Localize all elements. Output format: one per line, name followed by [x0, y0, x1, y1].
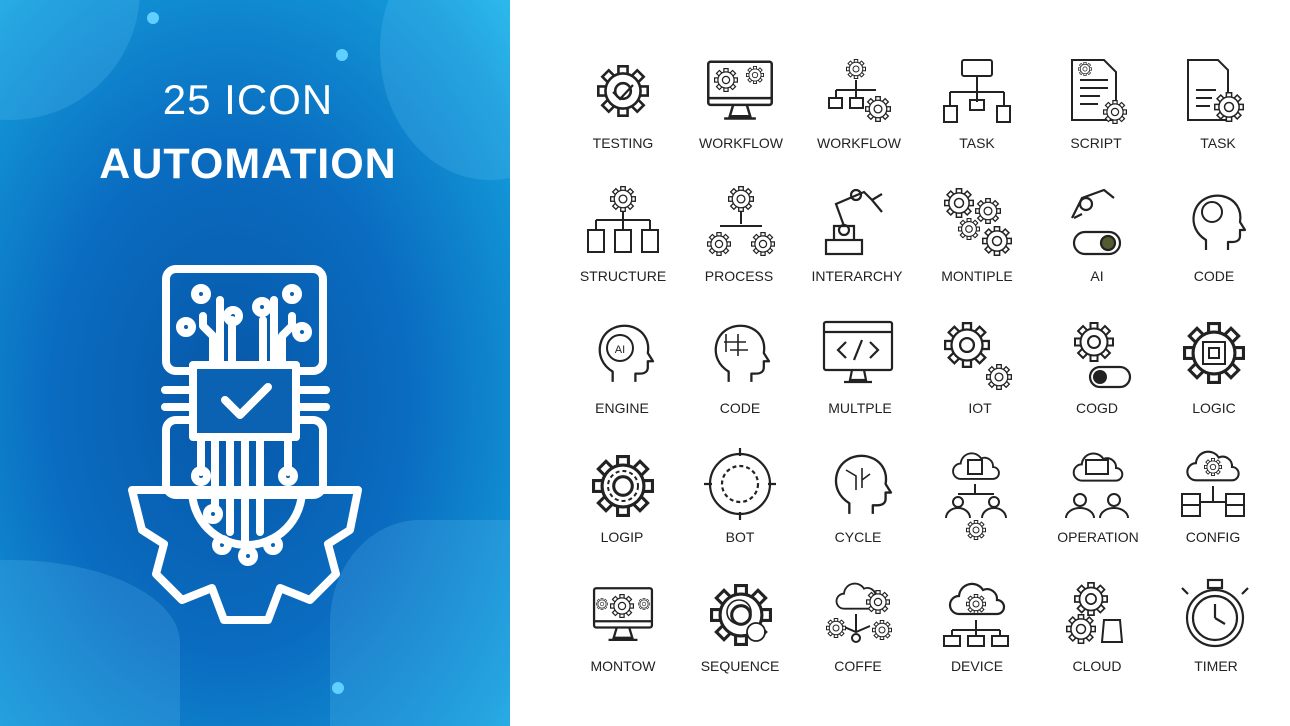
- icon: LOGIC (chip gear): [1185, 324, 1243, 416]
- icon: WORKFLOW 2: [817, 60, 902, 151]
- icon: MONTIPLE (gears): [941, 189, 1013, 284]
- icon: CODE (head brain): CODE: [1194, 268, 1234, 284]
- icon: CLOUD: [1067, 583, 1122, 674]
- icon: PROCESS: [705, 187, 774, 284]
- icon: SEQUENCE: SEQUENCE: [701, 658, 779, 674]
- icon: CYCLE: CYCLE: [835, 529, 881, 545]
- icon: COGD: [1075, 323, 1130, 416]
- icon: CYCLE: [835, 456, 891, 545]
- icon: TIMER: TIMER: [1194, 658, 1238, 674]
- icon: TASK 1: [944, 60, 1010, 151]
- icon: LOGIP: [594, 457, 652, 545]
- icon: MONTOW: [590, 588, 656, 674]
- icon: LOGIC (chip gear): LOGIC: [1192, 400, 1236, 416]
- icon: automation chip gear: [128, 12, 362, 694]
- icon: ENGINE (head AI): AI: [615, 344, 625, 356]
- icon: DEVICE: [944, 584, 1008, 674]
- icon: STRUCTURE: STRUCTURE: [580, 268, 666, 284]
- icon: BOT: BOT: [726, 529, 755, 545]
- icon: CONFIG: CONFIG: [1186, 529, 1240, 545]
- icon: MONTOW: MONTOW: [590, 658, 656, 674]
- icon: AI (toggle with arm): [1072, 190, 1120, 284]
- icon: OPERATION: [1057, 453, 1139, 545]
- icon: COFFE: [826, 584, 892, 674]
- icon: AI (toggle with arm): AI: [1090, 268, 1104, 284]
- icon: LOGIP: LOGIP: [601, 529, 643, 545]
- icon: DEVICE: DEVICE: [951, 658, 1003, 674]
- icon: TESTING: [593, 66, 653, 151]
- title: 25 ICON: 25 ICON: [163, 76, 333, 123]
- icon: team cloud chip: [946, 453, 1006, 540]
- icon: CODE (head brain): [1194, 196, 1245, 284]
- icon: PROCESS: PROCESS: [705, 268, 773, 284]
- icon: OPERATION: OPERATION: [1057, 529, 1139, 545]
- icon: CODE 2: [716, 326, 769, 416]
- icon: TASK 2: [1188, 60, 1243, 151]
- icon: COGD: COGD: [1076, 400, 1118, 416]
- icon: SCRIPT: SCRIPT: [1070, 135, 1122, 151]
- icon: IOT: IOT: [968, 400, 992, 416]
- icon: WORKFLOW 1: [699, 62, 784, 151]
- icon: CONFIG: [1182, 452, 1244, 545]
- icon: ENGINE (head AI): ENGINE: [595, 400, 649, 416]
- icon: SCRIPT: [1070, 60, 1126, 151]
- icon: TESTING: TESTING: [593, 135, 653, 151]
- icon: CODE 2: CODE: [720, 400, 760, 416]
- icon: STRUCTURE: [580, 187, 666, 284]
- icon: INTERARCHY (robot arm): [811, 190, 903, 284]
- panel: left hero: [0, 0, 510, 726]
- icon: TASK 1: TASK: [959, 135, 995, 151]
- icon: WORKFLOW 2: WORKFLOW: [817, 135, 902, 151]
- icon: BOT: [704, 448, 776, 545]
- icon: COFFE: COFFE: [834, 658, 882, 674]
- icon: MULTPLE (code monitor): MULTPLE: [828, 400, 892, 416]
- icon: INTERARCHY (robot arm): INTERARCHY: [811, 268, 903, 284]
- icon: TIMER: [1182, 580, 1248, 674]
- panel: icon grid: [580, 59, 1249, 674]
- icon: SEQUENCE: [701, 586, 779, 674]
- icon: TASK 2: TASK: [1200, 135, 1236, 151]
- icon: MONTIPLE (gears): MONTIPLE: [941, 268, 1013, 284]
- icon: IOT: [945, 323, 1011, 416]
- icon: WORKFLOW 1: WORKFLOW: [699, 135, 784, 151]
- icon: CLOUD: CLOUD: [1072, 658, 1122, 674]
- title: AUTOMATION: AUTOMATION: [99, 140, 397, 188]
- icon: ENGINE (head AI): [595, 326, 653, 416]
- icon: MULTPLE (code monitor): [824, 322, 892, 416]
